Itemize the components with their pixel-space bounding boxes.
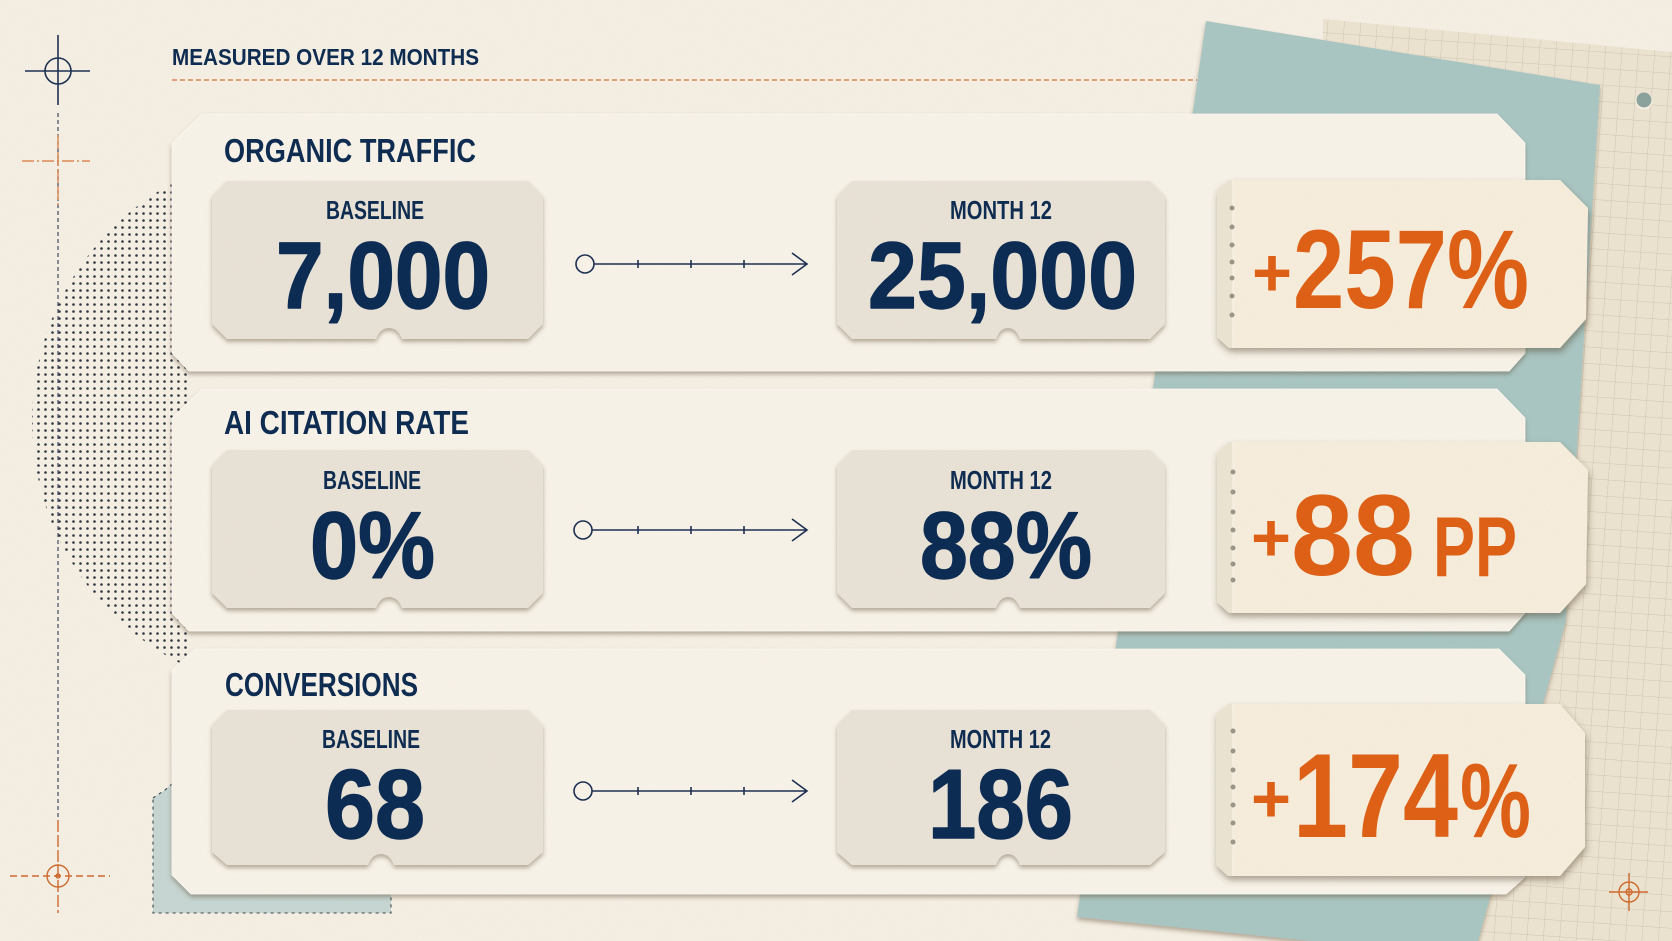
result tag: % [1460, 742, 1531, 860]
baseline ticket [212, 710, 543, 865]
result tag: + [1251, 761, 1291, 837]
month 12 ticket [837, 181, 1165, 339]
result tag [1216, 704, 1585, 876]
month 12 ticket [837, 450, 1165, 608]
result tag: 174 [1293, 729, 1458, 863]
month 12 ticket: MONTH 12 [950, 195, 1052, 225]
month 12 ticket: 88% [920, 493, 1092, 599]
result tag: + [1252, 235, 1292, 311]
heading: conversions: CONVERSIONS [225, 666, 418, 703]
panel: conversions [172, 649, 1585, 894]
teal torn patch [153, 784, 400, 913]
arrow [574, 780, 807, 802]
panel: organic traffic [172, 114, 1588, 371]
baseline ticket [212, 181, 543, 339]
teal paper sheet [1077, 21, 1600, 941]
baseline ticket: 7,000 [276, 223, 490, 329]
result tag [1217, 442, 1588, 613]
result tag [1217, 180, 1588, 348]
crosshair: top left [25, 35, 90, 105]
month 12 ticket: MONTH 12 [950, 465, 1052, 495]
heading: measured over 12 months: MEASURED OVER 12 MONTHS [172, 44, 479, 70]
heading: organic traffic: ORGANIC TRAFFIC [224, 132, 476, 169]
result tag: 88 [1291, 472, 1415, 600]
panel: ai citation rate [172, 389, 1588, 631]
result tag: 257% [1293, 207, 1529, 332]
month 12 ticket: MONTH 12 [950, 724, 1051, 754]
baseline ticket: 68 [325, 749, 425, 859]
month 12 ticket [837, 710, 1165, 865]
crosshair: bottom left [10, 820, 110, 913]
card background [172, 649, 1525, 894]
baseline ticket: BASELINE [322, 724, 420, 754]
result tag: + [1251, 500, 1291, 576]
month 12 ticket: 25,000 [868, 223, 1137, 329]
card background [172, 389, 1525, 631]
halftone semicircle [32, 184, 187, 663]
month 12 ticket: 186 [928, 749, 1073, 859]
baseline ticket: 0% [310, 493, 435, 599]
crosshair: bottom right [1609, 873, 1648, 911]
heading: ai citation rate: AI CITATION RATE [224, 404, 469, 441]
card background [172, 114, 1525, 371]
icon: punched hole [1636, 92, 1652, 110]
baseline ticket [212, 450, 543, 608]
baseline ticket: BASELINE [323, 465, 421, 495]
registration line [22, 113, 90, 820]
result tag: PP [1433, 500, 1517, 595]
grid paper sheet [1323, 19, 1672, 941]
arrow [574, 519, 807, 541]
baseline ticket: BASELINE [326, 195, 424, 225]
dashed rule [172, 79, 1197, 81]
arrow [576, 253, 807, 275]
